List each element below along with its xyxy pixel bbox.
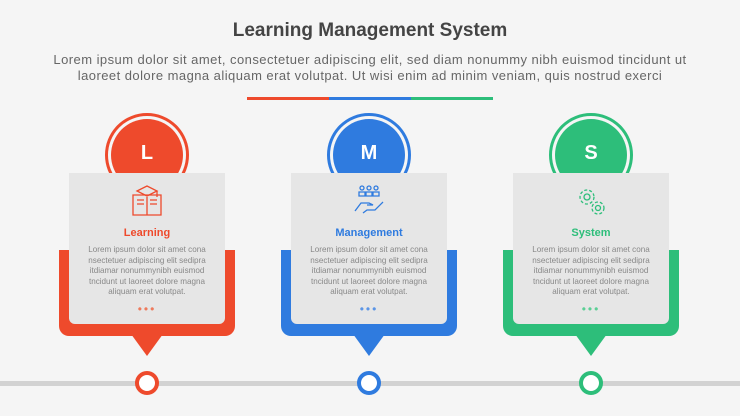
panel: learning: Lorem ipsum dolor sit amet cona — [88, 245, 206, 254]
panel: system: S — [584, 142, 598, 164]
timeline — [0, 381, 740, 386]
panel: system: nsectetuer adipiscing elit sedipra — [532, 256, 650, 264]
panel: system: ••• — [582, 302, 600, 316]
icon: hand with people — [354, 185, 384, 214]
panel: management: nsectetuer adipiscing elit sedipra — [310, 256, 428, 264]
panel: learning: nsectetuer adipiscing elit sedipra — [88, 256, 206, 264]
panel: management: Lorem ipsum dolor sit amet cona — [310, 245, 428, 254]
panel: management — [281, 113, 457, 356]
panel: learning: Learning — [124, 227, 170, 239]
panel: system — [503, 113, 679, 356]
panel: learning: aliquam erat volutpat. — [108, 287, 186, 296]
panel: system: aliquam erat volutpat. — [552, 287, 630, 296]
panel: management: tncidunt ut laoreet dolore magna — [311, 276, 427, 286]
subtitle: Lorem ipsum dolor sit amet, consectetuer adipiscing elit, sed diam nonummy nibh euismod tincidunt ut — [53, 52, 687, 67]
subtitle: laoreet dolore magna aliquam erat volutpat. Ut wisi enim ad minim veniam, quis nostrud exerci — [78, 68, 662, 83]
icon: gears — [579, 189, 605, 215]
timeline node: learning — [135, 371, 159, 395]
panel: learning: tncidunt ut laoreet dolore magna — [89, 276, 205, 286]
timeline node: system — [579, 371, 603, 395]
panel: system: Lorem ipsum dolor sit amet cona — [532, 245, 650, 254]
panel: management: Management — [335, 227, 403, 239]
subtitle — [53, 52, 687, 83]
title: Learning Management System — [233, 20, 507, 41]
panel: management: itdiamar nonummynibh euismod — [312, 266, 426, 275]
panel: system: tncidunt ut laoreet dolore magna — [533, 276, 649, 286]
icon: book — [132, 185, 162, 216]
timeline node: management — [357, 371, 381, 395]
panel: management: aliquam erat volutpat. — [330, 287, 408, 296]
panel: system: itdiamar nonummynibh euismod — [534, 266, 648, 275]
panel: learning: itdiamar nonummynibh euismod — [90, 266, 204, 275]
panel: management: ••• — [360, 302, 378, 316]
panel: learning — [59, 113, 235, 356]
panel: system: System — [571, 227, 611, 239]
panel: learning: L — [141, 142, 153, 164]
panel: learning: ••• — [138, 302, 156, 316]
divider — [247, 97, 493, 100]
panel: management: M — [361, 142, 377, 164]
